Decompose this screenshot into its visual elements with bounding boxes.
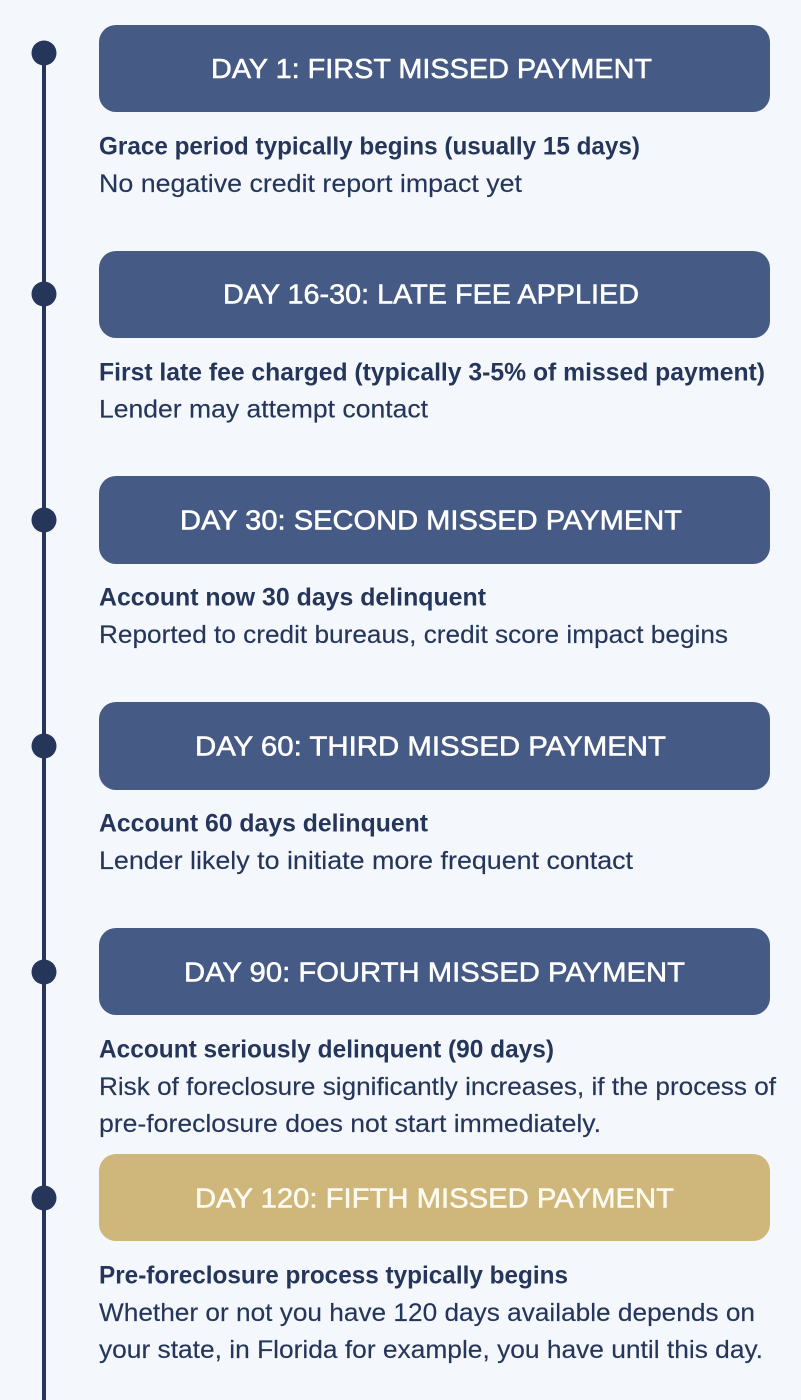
timeline dot: day 60	[32, 734, 56, 758]
text block: day 30: Reported to credit bureaus, credit score impact begins	[99, 621, 728, 649]
heading: day 1: DAY 1: FIRST MISSED PAYMENT	[211, 53, 652, 84]
text block: day 90: Risk of foreclosure significantly increases, if the process of	[99, 1073, 776, 1101]
text block: day 120: Pre-foreclosure process typically begins	[99, 1262, 568, 1290]
heading: day 60	[99, 702, 770, 790]
text block: day 30	[99, 584, 728, 649]
text block: day 60: Account 60 days delinquent	[99, 810, 429, 838]
timeline dot: day 120	[32, 1186, 56, 1210]
heading: day 16-30: DAY 16-30: LATE FEE APPLIED	[223, 278, 639, 310]
text block: day 60	[99, 810, 633, 875]
text block: day 90: pre-foreclosure does not start immediately.	[99, 1110, 601, 1138]
text block: day 1: Grace period typically begins (usually 15 days)	[99, 132, 640, 160]
heading: day 30	[99, 476, 770, 564]
timeline dot: day 16-30	[32, 282, 56, 306]
panel: day 30	[99, 476, 770, 649]
text block: day 120: your state, in Florida for example, you have until this day.	[99, 1336, 763, 1364]
text block: day 1	[99, 132, 640, 198]
text block: day 90: Account seriously delinquent (90 days)	[99, 1036, 554, 1064]
heading: day 90: DAY 90: FOURTH MISSED PAYMENT	[184, 956, 685, 988]
timeline dot: day 1	[32, 40, 56, 66]
panel: day 120	[99, 1154, 770, 1364]
text block: day 16-30: First late fee charged (typically 3-5% of missed payment)	[99, 358, 765, 386]
heading: day 120: DAY 120: FIFTH MISSED PAYMENT	[195, 1182, 674, 1214]
text block: day 60: Lender likely to initiate more frequent contact	[99, 847, 633, 875]
panel: day 1	[99, 25, 770, 198]
text block: day 120	[99, 1262, 763, 1364]
heading: day 30: DAY 30: SECOND MISSED PAYMENT	[180, 504, 682, 536]
text block: day 120: Whether or not you have 120 days available depends on	[99, 1299, 755, 1327]
heading: day 16-30	[99, 251, 770, 338]
heading: day 1	[99, 25, 770, 112]
text block: day 1: No negative credit report impact yet	[99, 170, 522, 198]
text block: day 30: Account now 30 days delinquent	[99, 584, 487, 612]
timeline line	[42, 53, 46, 1400]
text block: day 16-30: Lender may attempt contact	[99, 396, 428, 424]
heading: day 60: DAY 60: THIRD MISSED PAYMENT	[195, 730, 666, 762]
heading: day 120	[99, 1154, 770, 1241]
panel: day 60	[99, 702, 770, 875]
timeline dot: day 90	[32, 960, 56, 984]
heading: day 90	[99, 928, 770, 1015]
text block: day 90	[99, 1036, 776, 1138]
timeline dot: day 30	[32, 508, 56, 532]
panel: day 16-30	[99, 251, 770, 424]
text block: day 16-30	[99, 358, 765, 424]
panel: day 90	[99, 928, 776, 1138]
